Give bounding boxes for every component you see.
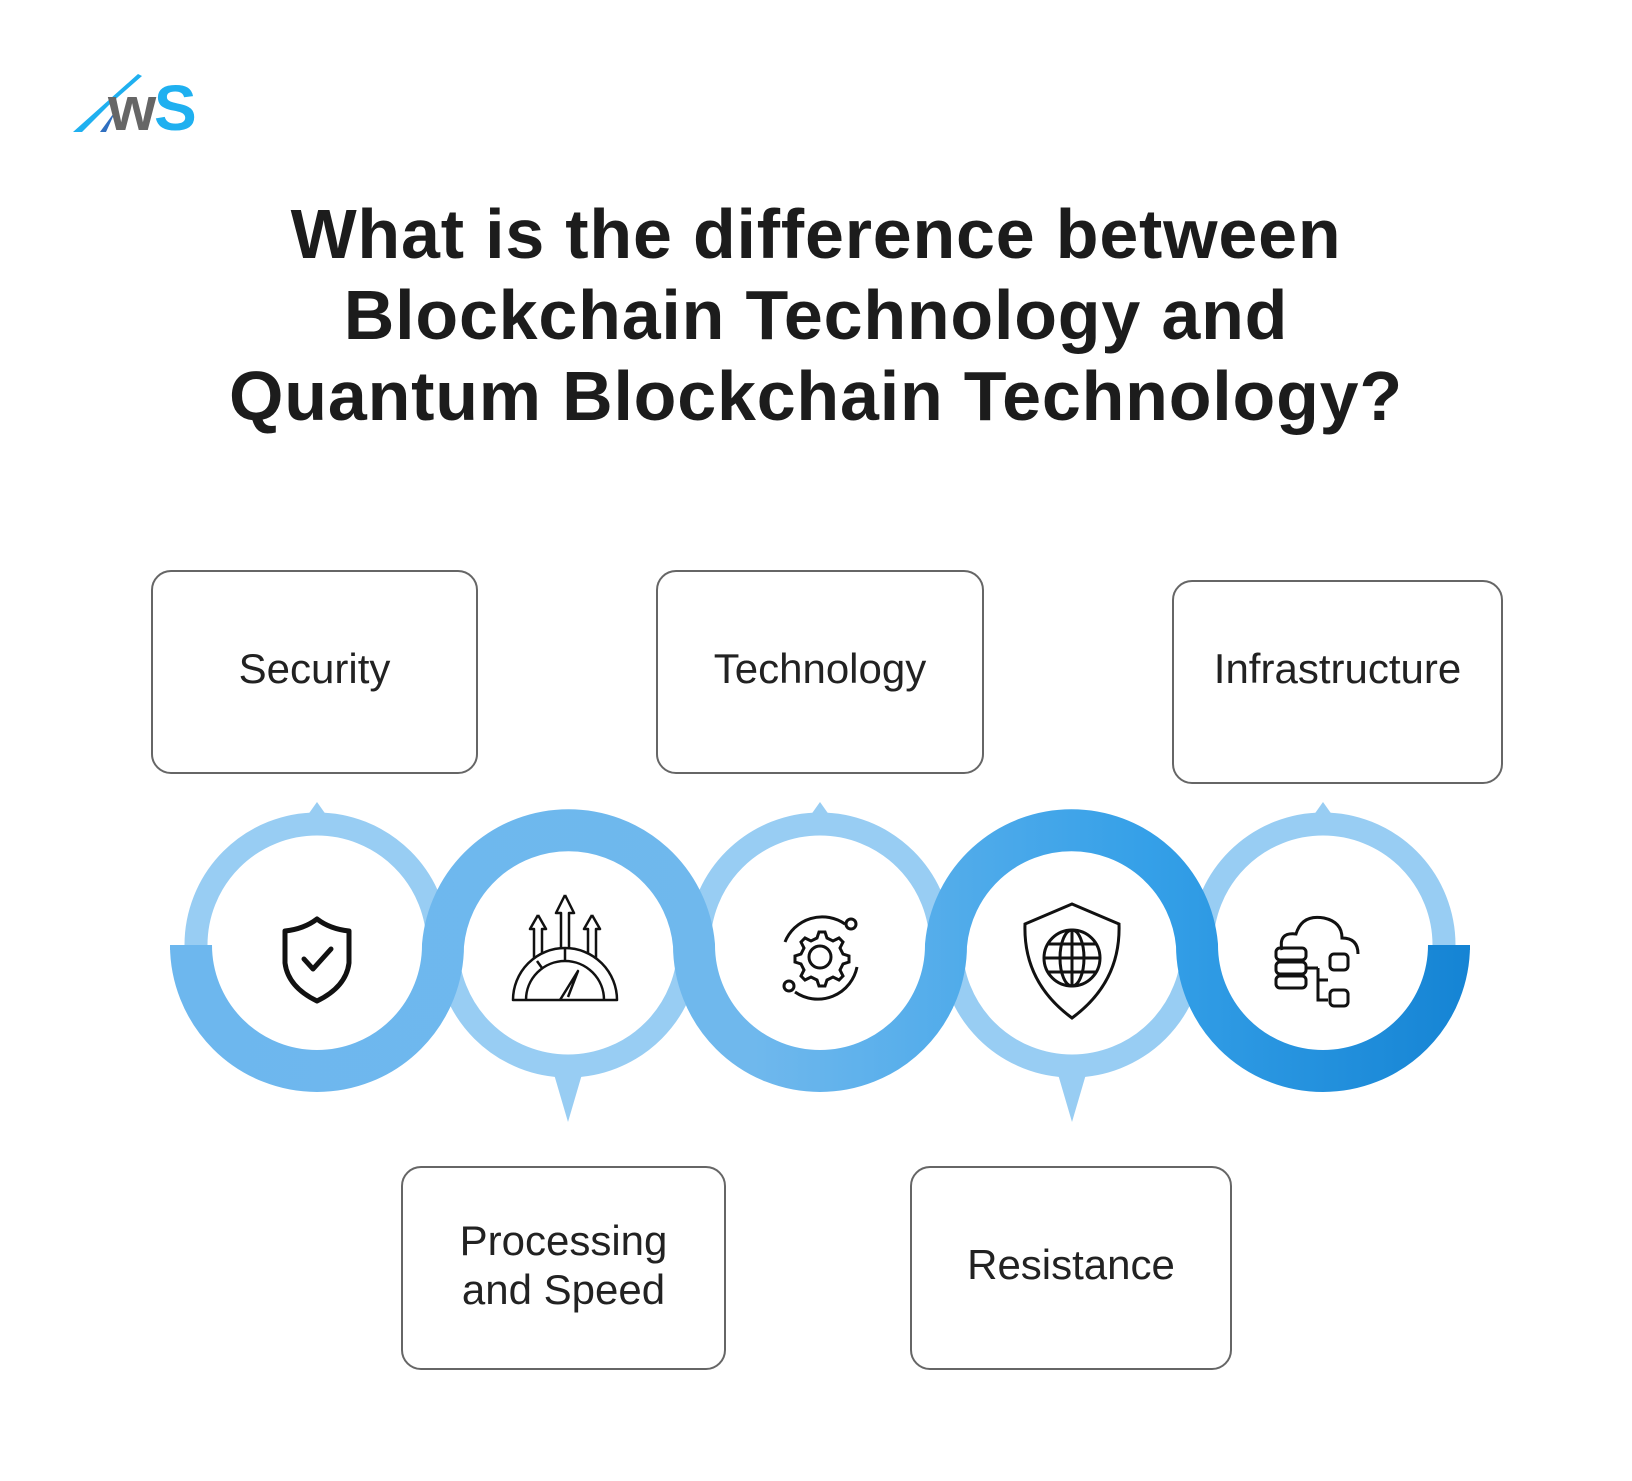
- box: Technology: [656, 570, 984, 774]
- box: Security: [151, 570, 478, 774]
- box: Resistance: Resistance: [967, 1241, 1175, 1288]
- icon: speed gauge: [512, 894, 618, 1002]
- box: Processing and Speed: and Speed: [462, 1266, 665, 1313]
- box: Resistance: [910, 1166, 1232, 1370]
- box: Processing and Speed: Processing: [460, 1217, 667, 1264]
- icon: gear orbit: [782, 915, 858, 1001]
- box: Security: Security: [239, 645, 390, 692]
- icon: shield globe: [1023, 902, 1121, 1020]
- title: Blockchain Technology and: [344, 276, 1288, 354]
- icon: cloud servers: [1274, 916, 1360, 1008]
- box: Processing and Speed: [401, 1166, 726, 1370]
- box: Technology: Technology: [714, 645, 926, 692]
- title: What is the difference between: [291, 195, 1341, 273]
- icon: shield check: [282, 916, 352, 1004]
- logo: [73, 72, 197, 135]
- box: Infrastructure: Infrastructure: [1214, 645, 1461, 692]
- box: Infrastructure: [1172, 580, 1503, 784]
- title: [229, 195, 1403, 435]
- title: Quantum Blockchain Technology?: [229, 357, 1403, 435]
